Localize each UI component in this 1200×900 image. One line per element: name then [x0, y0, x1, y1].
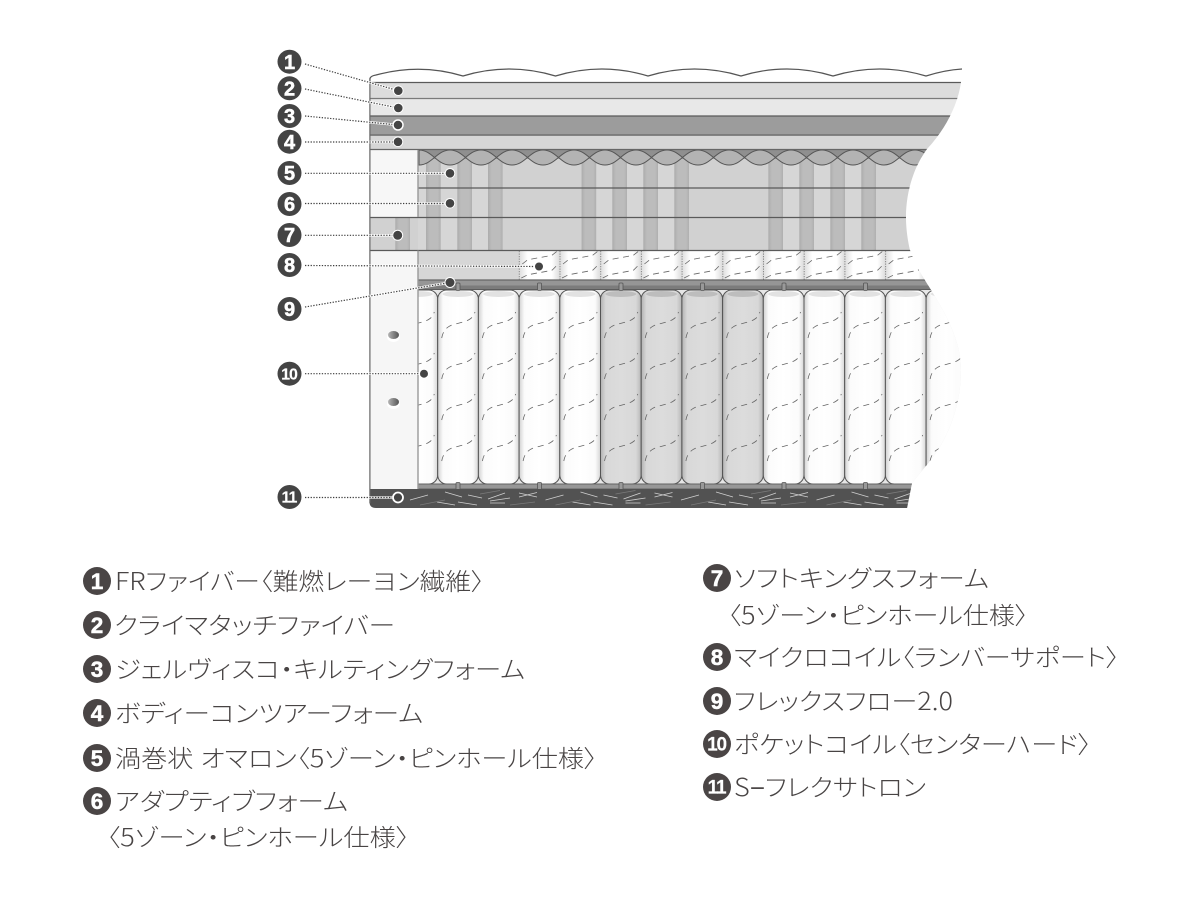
legend item 6: 6: [91, 789, 103, 814]
legend item 4: ボディーコンツアーフォーム: [115, 701, 423, 728]
legend item 8: マイクロコイル〈ランバーサポート〉: [734, 645, 1119, 672]
lighter zones between pinholes: [418, 150, 876, 250]
marker 5: 5: [284, 163, 295, 185]
legend item 3: 3: [91, 657, 103, 682]
leader 2: [305, 89, 403, 113]
layer 3: gel visco quilting foam: [370, 116, 970, 135]
marker 9: 9: [284, 299, 295, 321]
legend item 3: ジェルヴィスコ・キルティングフォーム: [115, 657, 525, 684]
legend item 9: フレックスフロー 2.0: [734, 682, 953, 718]
legend item 10: 10: [707, 735, 726, 756]
marker 8: 8: [284, 255, 295, 277]
lower side panel with pinholes: [370, 250, 418, 489]
leader 10: [305, 369, 428, 378]
marker 7: [278, 223, 302, 247]
marker 6: 6: [284, 194, 295, 216]
marker 4: 4: [284, 132, 296, 154]
legend item 8: 8: [711, 645, 723, 670]
marker 5: [278, 161, 302, 185]
leader 6: [305, 198, 455, 208]
legend item 2: クライマタッチファイバー: [114, 613, 395, 640]
legend item 5: 渦巻状 オマロン〈 5ゾーン・ピンホール仕様〉: [115, 739, 597, 775]
legend item 7: 〈5ゾーン・ピンホール仕様〉: [728, 596, 1028, 632]
marker 2: [278, 76, 302, 100]
legend item 11: S−フレクサトロン: [734, 768, 926, 804]
legend item 11: 11: [708, 778, 727, 799]
legend item 10: ポケットコイル〈センターハード〉: [734, 732, 1091, 759]
marker 1: [278, 50, 302, 74]
legend item 5: 5: [91, 746, 103, 771]
legend: left column: [83, 562, 597, 854]
layer 1: FR fiber: [370, 82, 970, 98]
leader 7: [305, 230, 403, 240]
numbered markers beside diagram: [278, 50, 302, 509]
marker 11: [278, 485, 302, 509]
leader 4: [305, 137, 403, 147]
microcoil row: [519, 251, 926, 280]
layer 7: soft king foam: [370, 218, 910, 250]
legend: right column: [703, 564, 1119, 804]
legend item 1: FRファイバー〈難燃レーヨン繊維〉: [115, 562, 484, 598]
top quilted cover outline: [370, 69, 962, 82]
marker 9: [278, 297, 302, 321]
leader lines and target dots: [305, 64, 544, 502]
marker 7: 7: [284, 225, 295, 247]
pinhole columns: [395, 150, 876, 250]
marker 3: [278, 104, 302, 128]
marker 10: [278, 362, 302, 386]
layer boundary lines: [370, 78, 970, 503]
marker 8: [278, 253, 302, 277]
mattress cross-section diagram: [370, 69, 970, 508]
mattress layers clipped to torn right edge: [370, 78, 970, 508]
legend item 6: アダプティブフォーム: [115, 789, 348, 816]
layers 5 and 6 base: [503, 150, 926, 217]
flex flow support band: [418, 280, 968, 290]
layer 4: body contour foam: [370, 135, 970, 150]
marker 10: 10: [281, 366, 298, 383]
marker 3: 3: [284, 106, 295, 128]
upper side panel: [370, 150, 418, 218]
pocket coil base: [432, 290, 931, 484]
legend item 6: [83, 787, 409, 854]
leader 3: [305, 116, 403, 130]
leader 9: [305, 278, 455, 307]
leader 11: [305, 492, 403, 502]
marker 2: 2: [284, 78, 295, 100]
legend item 1: 1: [91, 569, 103, 594]
layer 2: climate touch fiber: [370, 98, 970, 116]
marker 6: [278, 192, 302, 216]
legend item 7: 7: [711, 566, 723, 591]
swirl top of layer 5: woven lobes: [419, 150, 946, 165]
legend item 2: 2: [91, 613, 103, 638]
legend item 6: 〈5ゾーン・ピンホール仕様〉: [107, 818, 409, 854]
legend item 7: ソフトキングスフォーム: [734, 566, 989, 593]
pocket coils: [397, 290, 967, 484]
marker 11: 11: [282, 490, 298, 507]
leader 1: [305, 64, 403, 95]
legend item 7: [703, 564, 1028, 632]
leader 8: [305, 262, 544, 271]
marker 1: 1: [284, 52, 295, 74]
legend item 9: 9: [711, 689, 723, 714]
marker 4: [278, 130, 302, 154]
S-flex base layer: [370, 489, 944, 508]
legend item 4: 4: [91, 701, 104, 726]
microcoil zone left foam: [418, 251, 520, 280]
swirl top of layer 5: dark band: [423, 150, 926, 158]
bottom rod band: [418, 482, 918, 490]
leader 5: [305, 168, 455, 178]
